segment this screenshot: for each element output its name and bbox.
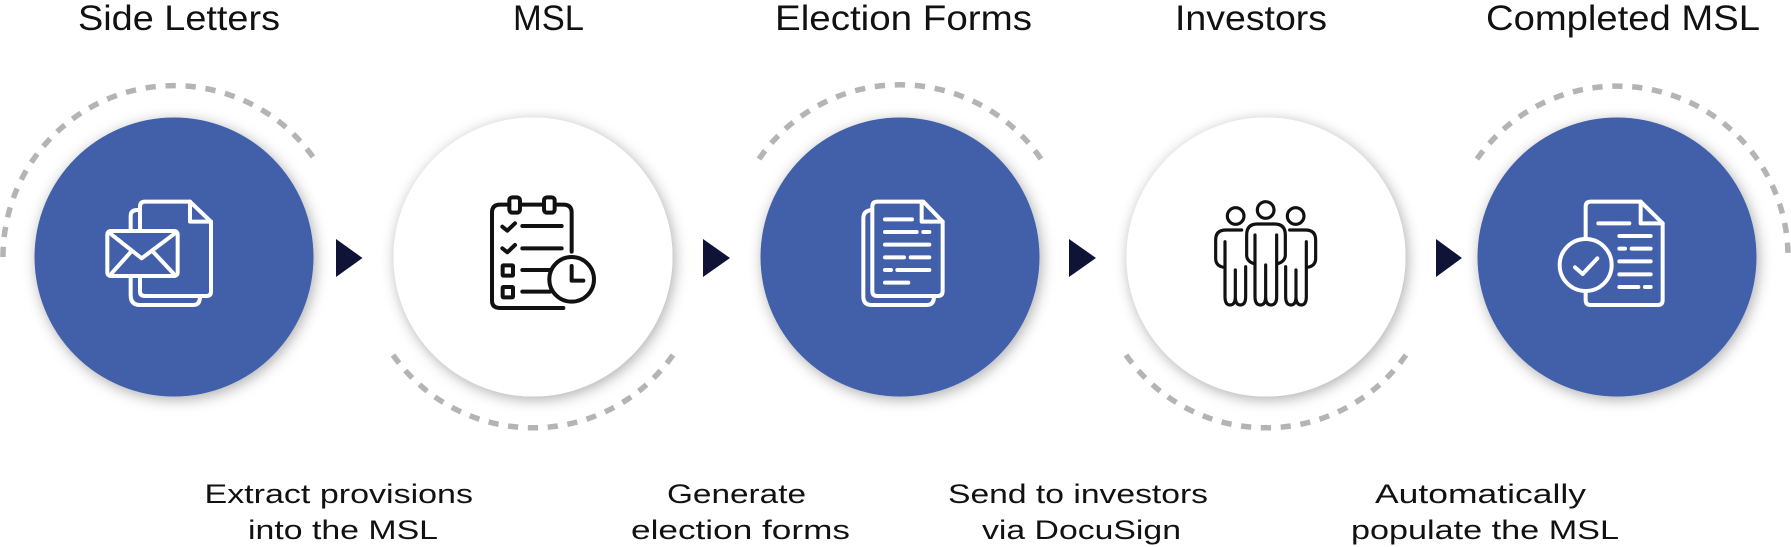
arrow 2	[703, 239, 730, 277]
caption: automatically populate: Automatically	[1375, 479, 1587, 509]
dashed arc	[3, 86, 313, 257]
icon: envelope with documents	[107, 202, 211, 305]
caption: extract provisions: Extract provisions	[204, 479, 473, 509]
circle	[1126, 118, 1406, 396]
heading: MSL: MSL	[513, 0, 584, 38]
caption: extract provisions: into the MSL	[248, 515, 438, 545]
dashed arc	[393, 355, 673, 428]
arrow 4	[1436, 239, 1462, 277]
heading: Side Letters: Side Letters	[78, 0, 280, 38]
step 4: investors	[1126, 0, 1406, 428]
arrow 3	[1069, 239, 1096, 277]
caption: send to investors: Send to investors	[948, 479, 1208, 509]
icon: document with check	[1560, 202, 1663, 305]
dashed arc	[759, 85, 1041, 159]
dashed arc	[1126, 355, 1406, 428]
icon: group of people	[1216, 202, 1316, 305]
heading: Investors: Investors	[1175, 0, 1327, 38]
icon: documents	[863, 202, 943, 305]
step 2: MSL	[393, 0, 673, 428]
caption: send to investors: via DocuSign	[982, 515, 1181, 545]
caption: generate election forms: election forms	[631, 515, 850, 545]
circle	[34, 118, 314, 396]
step 3: election forms	[759, 0, 1041, 396]
caption: automatically populate: populate the MSL	[1351, 515, 1619, 545]
arrow 1	[336, 239, 362, 277]
step 5: completed MSL	[1477, 0, 1788, 396]
icon: checklist with clock	[492, 197, 594, 308]
dashed arc	[1477, 86, 1788, 253]
caption: generate election forms: Generate	[667, 479, 806, 509]
heading: Election Forms: Election Forms	[775, 0, 1032, 38]
circle	[1478, 118, 1756, 396]
circle	[760, 118, 1040, 396]
heading: Completed MSL: Completed MSL	[1486, 0, 1760, 38]
step 1: side letters	[3, 0, 313, 396]
circle	[394, 118, 672, 396]
